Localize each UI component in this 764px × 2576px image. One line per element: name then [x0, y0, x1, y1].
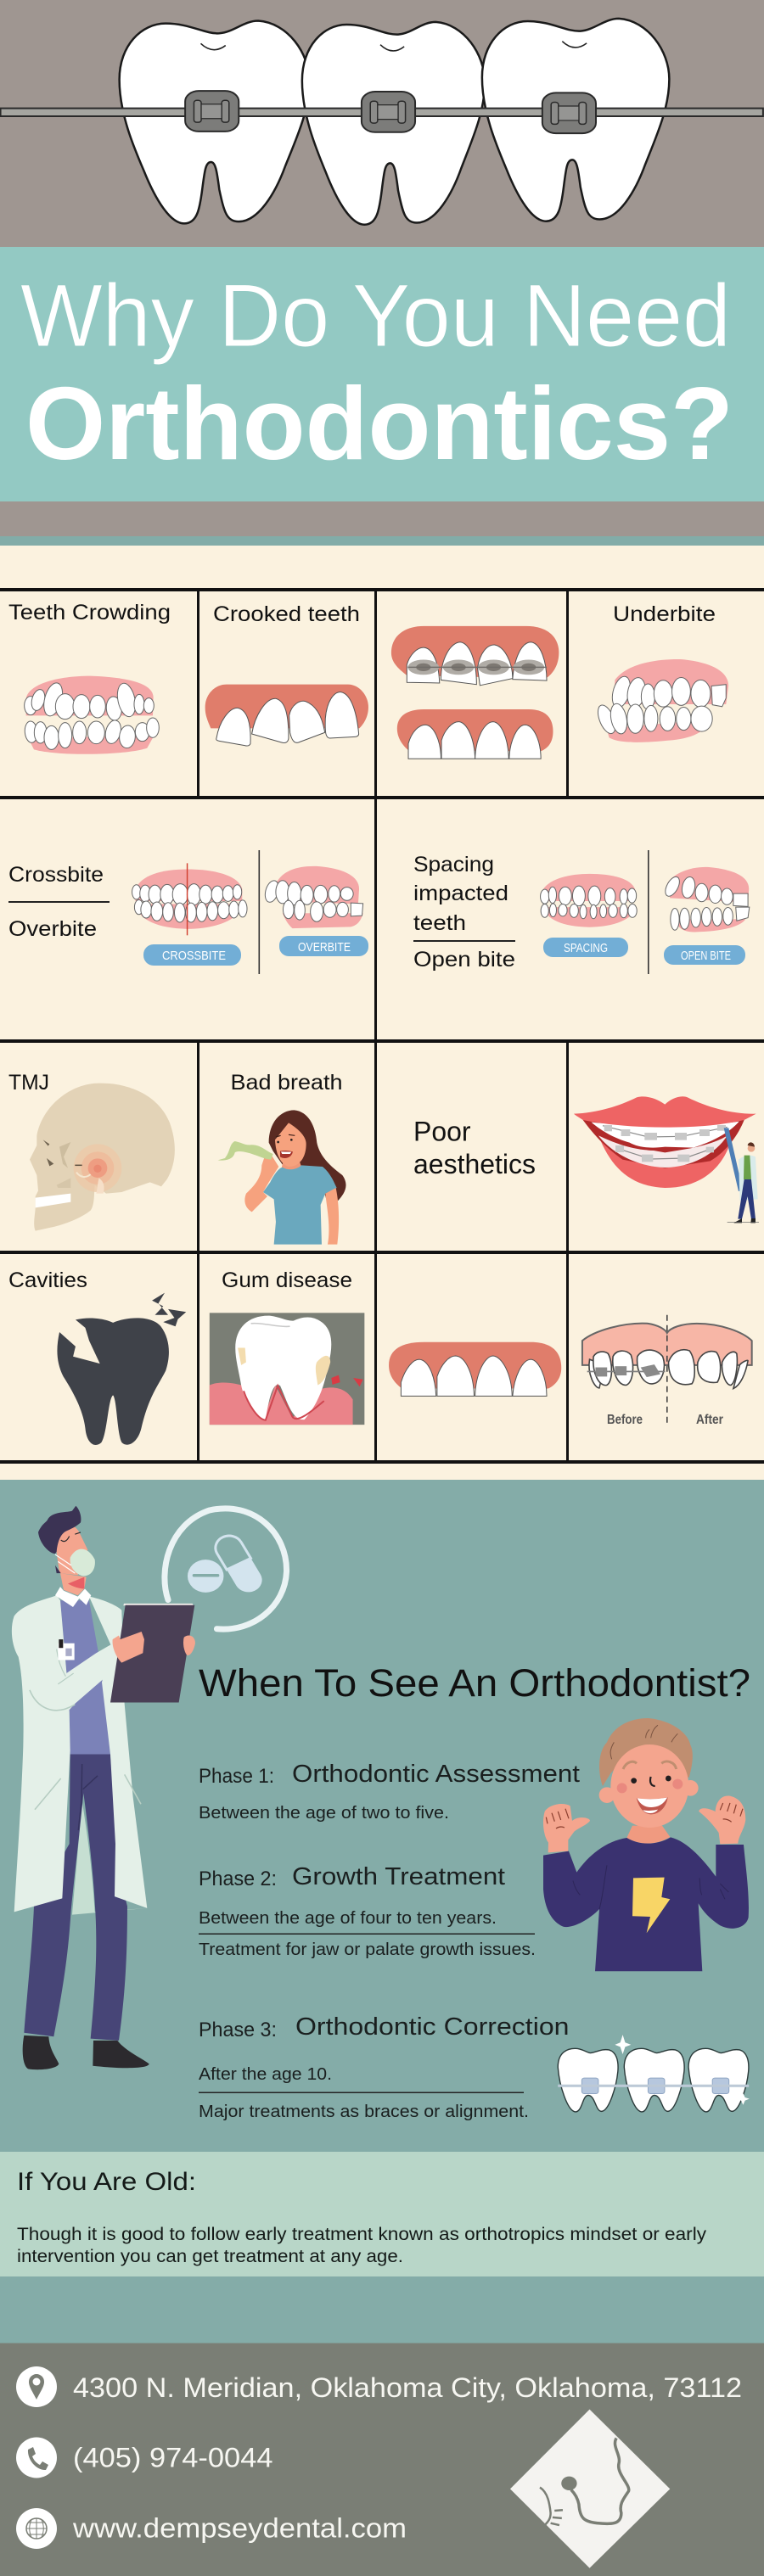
text: Before / After labels: After [696, 1413, 723, 1427]
text: Gum disease: Gum disease [222, 1268, 352, 1292]
icon: cracked dark tooth [57, 1293, 186, 1445]
panel: if you are old [0, 2152, 764, 2276]
text: Bad breath: Bad breath [231, 1071, 343, 1095]
text: Poor aesthetics: Poor [413, 1117, 471, 1147]
text: Spacing impacted teeth: teeth [413, 911, 466, 935]
text block: advice: intervention you can get treatment at any age. [17, 2247, 403, 2266]
panel: when to see an orthodontist [0, 1480, 764, 2152]
icon: smiling mouth with braces and dentist [574, 1096, 759, 1223]
icon: crooked front teeth [205, 685, 368, 746]
icon: gum disease tooth [210, 1313, 364, 1425]
badge: OVERBITE: OVERBITE [298, 940, 351, 955]
text block: Phase 2: Treatment for jaw or palate growth issues. [199, 1940, 536, 1959]
text: Open bite: Open bite [413, 948, 515, 972]
icon: skull with jaw pain [30, 1084, 175, 1231]
icon: spacing [541, 874, 637, 927]
title: Orthodontics? [25, 366, 733, 481]
text block: Phase 1: Between the age of two to five. [199, 1803, 449, 1823]
icon: location pin [16, 2366, 57, 2407]
text block: Phase 3: After the age 10. [199, 2064, 332, 2084]
panel: header background [0, 0, 764, 546]
text: TMJ: TMJ [8, 1071, 49, 1095]
badge: SPACING: SPACING [564, 941, 608, 955]
text block: Phase 3 [199, 2013, 569, 2121]
panel: contact footer [0, 2344, 764, 2576]
text block: advice: Though it is good to follow early treatment known as orthotropics mindset or early [17, 2225, 707, 2244]
icon: straight front teeth [389, 1342, 561, 1396]
text block: Phase 2 [199, 1863, 536, 1959]
text: Overbite: Overbite [8, 917, 97, 941]
text: Before / After labels [607, 1413, 723, 1427]
title: Why Do You Need [20, 266, 731, 366]
icon: pills in ring [165, 1509, 287, 1629]
icon: crossbite [132, 863, 247, 935]
text block: Phase 2: Between the age of four to ten years. [199, 1908, 497, 1928]
icon: underbite teeth [594, 659, 728, 742]
icon: crowded teeth [24, 676, 159, 754]
text block: Phase 1 [199, 1761, 580, 1823]
icon: overbite [263, 866, 363, 928]
text block: Phase 3: Major treatments as braces or alignment. [199, 2102, 529, 2121]
icon: diamond logo with face profile [510, 2410, 670, 2568]
badge: CROSSBITE [143, 944, 241, 966]
illustration: three teeth with braces [1, 19, 763, 225]
heading: When To See An Orthodontist?: When To See An Orthodontist? [199, 1661, 750, 1705]
icon: open bite [663, 867, 750, 932]
icon: phone [16, 2437, 57, 2478]
text block: Phase 1: Phase 1: [199, 1765, 274, 1788]
heading: If You Are Old: If You Are Old: [17, 2168, 196, 2196]
text block: Phase 2: Growth Treatment [292, 1863, 505, 1890]
text: address: 4300 N. Meridian, Oklahoma City, Oklahoma, 73112 [73, 2372, 742, 2403]
text: Teeth Crowding: Teeth Crowding [8, 601, 171, 624]
icon: woman with bad breath [218, 1110, 345, 1245]
text: Underbite: Underbite [613, 602, 716, 626]
text: Spacing impacted teeth: Spacing [413, 853, 494, 876]
text: website: www.dempseydental.com [72, 2513, 407, 2544]
panel: title banner [0, 247, 764, 501]
illustration: doctor with clipboard [12, 1506, 195, 2069]
badge: SPACING [543, 938, 628, 957]
text: Crossbite: Crossbite [8, 863, 104, 887]
badge: CROSSBITE: CROSSBITE [162, 949, 226, 963]
icon: before and after braces [582, 1315, 752, 1424]
text: Cavities: Cavities [8, 1268, 87, 1292]
icon: teeth with braces and straightened teeth [391, 626, 559, 759]
badge: OPEN BITE: OPEN BITE [681, 949, 731, 963]
text: Poor aesthetics [413, 1117, 536, 1179]
text: Poor aesthetics: aesthetics [413, 1149, 536, 1179]
text block: Phase 2: Phase 2: [199, 1868, 277, 1890]
badge: OVERBITE [279, 936, 368, 956]
illustration: happy boy pointing at himself [543, 1718, 749, 1971]
text block: Phase 1: Orthodontic Assessment [292, 1761, 580, 1788]
text block: advice [17, 2225, 707, 2266]
text: Crooked teeth: Crooked teeth [213, 602, 360, 626]
title [20, 266, 733, 481]
text: Before / After labels: Before [607, 1413, 643, 1427]
badge: OPEN BITE [664, 945, 745, 965]
icon: globe [16, 2508, 57, 2549]
text block: Phase 3: Phase 3: [199, 2019, 277, 2041]
text: Spacing impacted teeth: impacted [413, 882, 508, 905]
text: Spacing impacted teeth [413, 853, 508, 935]
illustration: three small teeth with braces [558, 2035, 750, 2112]
text: phone: (405) 974-0044 [73, 2442, 273, 2472]
text block: Phase 3: Orthodontic Correction [295, 2013, 569, 2041]
panel: problems grid [0, 546, 764, 1480]
